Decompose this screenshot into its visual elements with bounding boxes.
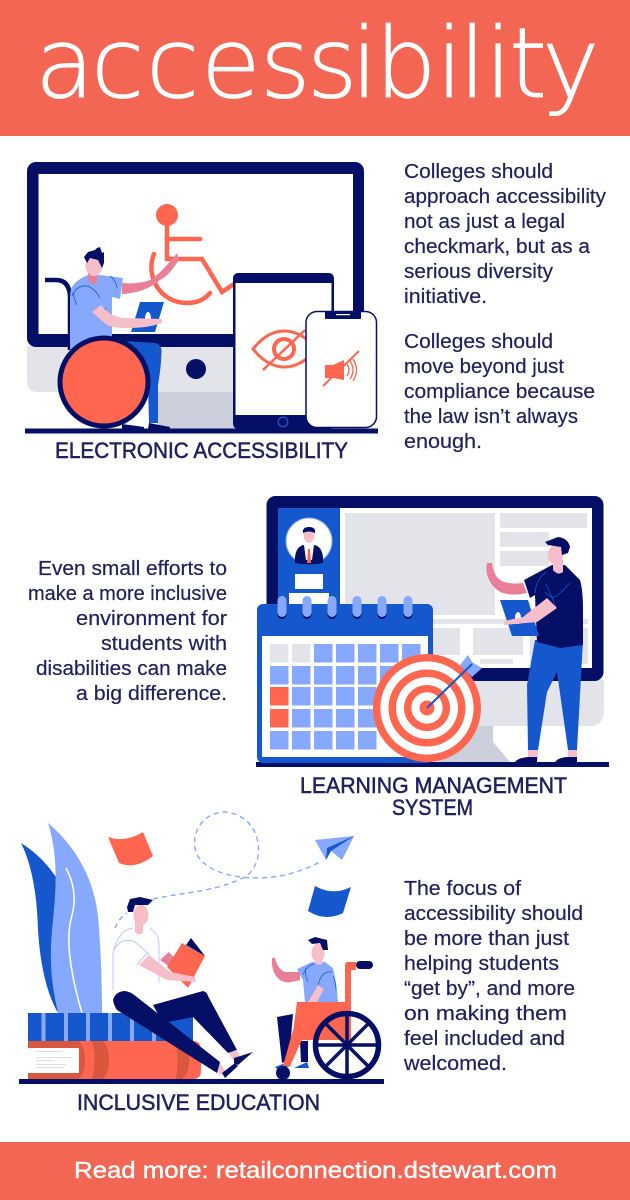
text block: beyond compliance: the law isn’t always (404, 406, 578, 428)
phone (306, 312, 376, 428)
text block: small efforts: make a more inclusive (28, 583, 227, 605)
text block: legal checkmark: Colleges should (404, 161, 553, 183)
large wheel (316, 1014, 378, 1076)
paper airplane (315, 836, 354, 860)
title: accessibility (35, 7, 599, 120)
text block: focus of accessibility: on making them (404, 1003, 567, 1025)
child in wheelchair (272, 937, 378, 1080)
illustration: learning management system (256, 496, 609, 767)
text block: focus of accessibility: feel included and (404, 1028, 565, 1050)
illustration: inclusive education (19, 812, 384, 1084)
floor line (256, 762, 609, 767)
icon: muted speaker (323, 351, 359, 386)
floor line (25, 428, 378, 434)
text block: focus of accessibility: helping students (404, 953, 559, 975)
text block: small efforts: a big difference. (76, 683, 227, 705)
text block: legal checkmark: serious diversity (404, 261, 553, 283)
text block: beyond compliance: Colleges should (404, 331, 553, 353)
label: learning management system: LEARNING MANAGEMENT (300, 773, 567, 798)
text block: legal checkmark: checkmark, but as a (404, 236, 591, 258)
floor line (19, 1079, 384, 1084)
text block: small efforts: disabilities can make (36, 658, 227, 680)
text block: focus of accessibility: welcomed. (403, 1053, 507, 1075)
text block: focus of accessibility (403, 878, 583, 1075)
text block: focus of accessibility: be more than just (404, 928, 569, 950)
footer link text: Read more: retailconnection.dstewart.com (74, 1157, 557, 1183)
text block: legal checkmark: initiative. (404, 286, 487, 308)
calendar rings (278, 596, 412, 619)
text block: small efforts (28, 558, 227, 705)
text block: legal checkmark (404, 161, 606, 308)
man standing (486, 537, 583, 764)
tablet (233, 273, 334, 429)
text block: small efforts: Even small efforts to (38, 558, 227, 580)
monitor (27, 162, 364, 429)
profile avatar (286, 518, 332, 564)
text block: focus of accessibility: The focus of (404, 878, 521, 900)
flying book: blue (308, 886, 351, 917)
text block: beyond compliance: compliance because (404, 381, 595, 403)
text block: focus of accessibility: “get by”, and more (404, 978, 575, 1000)
label: electronic accessibility: ELECTRONIC ACCESSIBILITY (55, 438, 348, 463)
illustration: electronic accessibility (25, 162, 378, 434)
label: inclusive education: INCLUSIVE EDUCATION (77, 1090, 320, 1115)
text block: small efforts: students with (101, 633, 227, 655)
label: learning management system: SYSTEM (392, 795, 473, 820)
person in wheelchair (45, 247, 179, 429)
text block: beyond compliance (404, 331, 595, 453)
plant leaves (21, 823, 102, 1013)
text block: legal checkmark: approach accessibility (404, 186, 606, 208)
text block: legal checkmark: not as just a legal (404, 211, 565, 233)
seated man reading (113, 897, 253, 1078)
flying book: coral (108, 832, 153, 865)
target with arrow (373, 654, 482, 762)
text block: focus of accessibility: accessibility should (404, 903, 583, 925)
dashed flight path (115, 812, 320, 928)
footer banner (0, 1142, 630, 1200)
text block: beyond compliance: move beyond just (404, 356, 564, 378)
icon: wheelchair symbol (151, 204, 234, 303)
calendar (257, 596, 433, 763)
stacked books (28, 1013, 201, 1079)
monitor (266, 496, 604, 762)
text block: beyond compliance: enough. (404, 431, 482, 453)
label: learning management system (300, 773, 567, 820)
icon: crossed-out eye (253, 330, 317, 370)
text block: small efforts: environment for (76, 608, 227, 630)
header banner (0, 0, 630, 136)
